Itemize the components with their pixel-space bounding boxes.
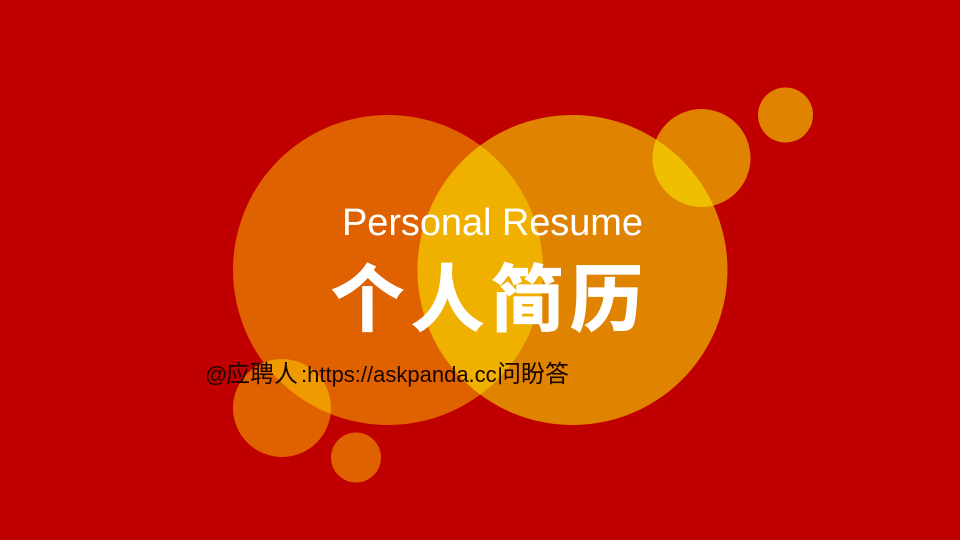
upper circle overlap [652,140,714,207]
large circles overlap [418,146,543,394]
main title: 历 [570,260,643,341]
upper small circle [758,88,813,142]
main title: 简 [491,260,564,341]
upper medium circle [652,109,750,207]
lower medium circle [233,359,331,457]
lower small circle [331,432,381,482]
subtitle: Personal Resume: Personal Resume [342,202,643,244]
applicant credit line: @ [205,362,227,387]
resume cover slide [206,88,813,482]
lower circle overlap [264,359,331,414]
large left circle [233,115,543,425]
main title: 个 [331,260,404,341]
applicant credit line: 问盼答 [497,361,569,388]
large right circle [418,115,728,425]
main title: 人 [411,260,484,341]
applicant credit line: :https://askpanda.cc [301,362,497,387]
applicant credit line: 应聘人 [226,361,298,388]
